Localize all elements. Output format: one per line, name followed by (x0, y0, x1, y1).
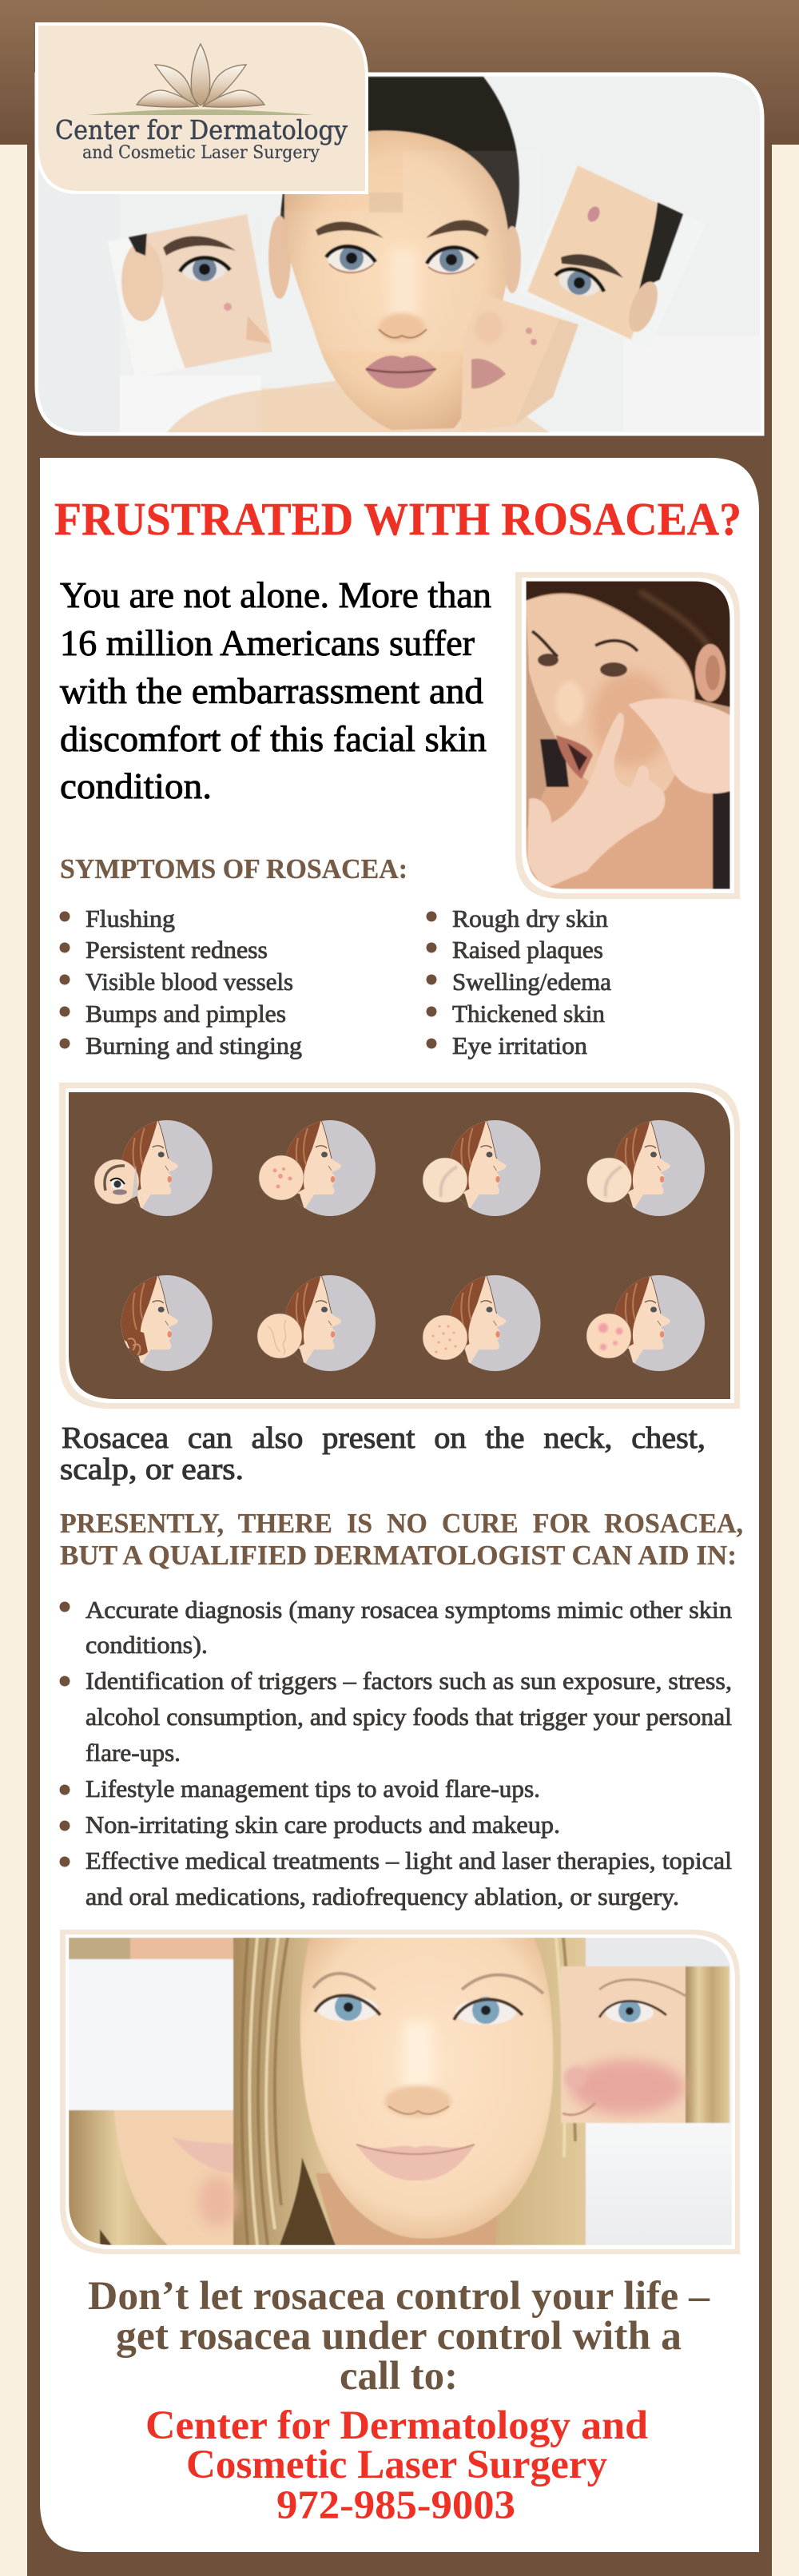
neck chest scalp text (60, 1421, 706, 1486)
contact details: 972-985-9003 (276, 2483, 515, 2528)
central eyes (315, 1994, 523, 2025)
right hand (628, 698, 730, 793)
heading: no cure: BUT A QUALIFIED DERMATOLOGIST CAN AID IN: (60, 1540, 737, 1571)
intro paragraph: 16 million Americans suffer (60, 622, 475, 663)
brows (316, 221, 384, 238)
dermatologist aid list: conditions). (85, 1631, 208, 1659)
symptoms list right: Rough dry skin (452, 904, 608, 932)
hair (526, 581, 730, 707)
illustration: flushing (111, 1274, 213, 1379)
mouth (556, 735, 593, 779)
symptoms list right: Swelling/edema (452, 968, 611, 996)
illustration: eye irritation (94, 1119, 213, 1224)
left small photo (109, 214, 273, 369)
ear (695, 644, 725, 702)
central lips (356, 2145, 475, 2180)
intro paragraph: You are not alone. More than (60, 574, 491, 615)
chin panel (461, 298, 578, 431)
left hand (527, 713, 665, 889)
right small photo (527, 165, 684, 340)
contact details: Center for Dermatology and (145, 2403, 648, 2448)
dark top strips (713, 791, 730, 889)
top brown band (0, 0, 799, 145)
hair back (368, 76, 520, 230)
lips (365, 356, 436, 388)
photo: woman touching face (515, 572, 740, 899)
symptoms list left: Bumps and pimples (85, 1000, 286, 1028)
symptoms list left (59, 904, 302, 1059)
ears (268, 216, 291, 299)
call to action: call to: (340, 2354, 458, 2399)
intro paragraph: condition. (60, 765, 212, 806)
dermatologist aid list: and oral medications, radiofrequency ablation, or surgery. (85, 1882, 679, 1910)
lower-left panel (69, 2110, 237, 2245)
symptoms list left: Flushing (85, 904, 175, 932)
symptoms list right: Eye irritation (452, 1032, 588, 1059)
neck chest scalp text: scalp, or ears. (60, 1453, 244, 1486)
right background (730, 1969, 731, 2028)
dermatologist aid list: Non-irritating skin care products and makeup. (85, 1811, 560, 1839)
intro paragraph (60, 574, 491, 806)
icon: lotus logo (137, 44, 264, 107)
intro paragraph: discomfort of this facial skin (60, 718, 487, 759)
symptoms list left: Persistent redness (85, 936, 268, 964)
face (526, 594, 694, 799)
logo text: Center for Dermatology (55, 114, 348, 145)
right rosacea panel (561, 1966, 729, 2123)
symptoms list right (427, 904, 611, 1059)
dermatologist aid list: flare-ups. (85, 1739, 181, 1767)
heading: symptoms: SYMPTOMS OF ROSACEA: (60, 853, 407, 885)
illustration: visible blood vessels (257, 1274, 376, 1379)
nose (390, 248, 417, 320)
brows (532, 631, 558, 657)
heading: no cure: PRESENTLY, THERE IS NO CURE FOR ROSACEA, (60, 1508, 743, 1539)
green ground line (86, 109, 314, 115)
central face (300, 1938, 553, 2239)
eyes (538, 654, 559, 666)
panel: symptom illustrations (59, 1083, 740, 1409)
logo panel: and Cosmetic Laser Surgery (82, 143, 320, 163)
dermatologist aid list (59, 1596, 733, 1910)
central hair (233, 1938, 593, 2245)
symptoms list right: Thickened skin (452, 1000, 605, 1028)
main white panel (40, 458, 759, 2552)
call to action: Don’t let rosacea control your life – (88, 2274, 710, 2319)
dermatologist aid list: Lifestyle management tips to avoid flare-ups. (85, 1775, 540, 1803)
dermatologist aid list: alcohol consumption, and spicy foods that trigger your personal (85, 1703, 732, 1731)
neck and chest (526, 762, 714, 888)
central nose (403, 2021, 432, 2093)
shoulder (167, 380, 550, 432)
neck chest scalp text: Rosacea can also present on the neck, chest, (62, 1421, 706, 1455)
nose (555, 681, 584, 725)
symptoms list left: Visible blood vessels (85, 968, 293, 996)
illustration: raised plaques (587, 1119, 705, 1224)
heading: no cure (60, 1508, 743, 1571)
top-left strip (129, 1938, 234, 1960)
call to action: get rosacea under control with a (116, 2314, 682, 2359)
logo panel (37, 24, 367, 193)
face (284, 130, 509, 430)
dermatologist aid list: Accurate diagnosis (many rosacea symptoms mimic other skin (85, 1596, 733, 1624)
dermatologist aid list: Identification of triggers – factors such as sun exposure, stress, (85, 1667, 732, 1695)
title: FRUSTRATED WITH ROSACEA? (54, 493, 741, 545)
symptoms list right: Raised plaques (452, 936, 603, 964)
central brows (313, 1974, 376, 1990)
symptoms list left: Burning and stinging (85, 1032, 302, 1059)
illustration: redness patches (586, 1274, 705, 1379)
eyes (326, 246, 478, 274)
intro paragraph: with the embarrassment and (60, 670, 483, 711)
call to action (88, 2274, 710, 2399)
contact details (145, 2403, 648, 2528)
contact details: Cosmetic Laser Surgery (186, 2443, 607, 2487)
illustration: bumps (259, 1119, 376, 1224)
left white panel (69, 1959, 233, 2110)
illustration: thickened skin (423, 1119, 540, 1224)
central neck (316, 2173, 499, 2245)
bottom photo collage (60, 1930, 740, 2254)
illustration: papules (423, 1274, 540, 1379)
dermatologist aid list: Effective medical treatments – light and laser therapies, topical (85, 1847, 732, 1874)
hero photo collage (37, 74, 762, 435)
